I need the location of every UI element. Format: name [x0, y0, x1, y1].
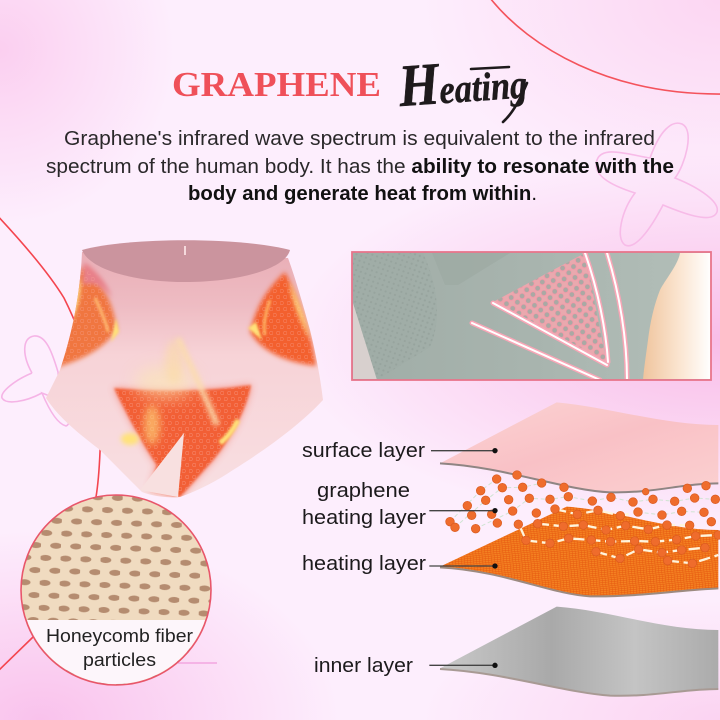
decorative red curve: left: [0, 212, 101, 673]
graphene bonds: [520, 509, 718, 563]
shoulder ribbing: [432, 253, 510, 285]
honeycomb fiber magnifier: [20, 494, 212, 686]
magnifier texture: [21, 495, 211, 685]
description line 1: Graphene's infrared wave spectrum is equivalent to the infrared: [64, 128, 655, 150]
title word: GRAPHENE: GRAPHENE: [172, 65, 381, 104]
inner layer sheet: [440, 607, 718, 695]
decorative flower outline: left: [2, 336, 69, 426]
layer labels: [302, 440, 426, 677]
fold highlight triangle: [140, 433, 184, 497]
heat patch: left hip: [60, 262, 121, 370]
description line 3: body and generate heat from within .: [188, 183, 537, 205]
layers diagram: [429, 402, 720, 696]
label: surface layer: surface layer: [302, 440, 425, 462]
heat patch: centre triangle with flame: [110, 338, 255, 500]
description line 2: spectrum of the human body. It has the ability to resonate with the: [46, 156, 674, 178]
leader lines and dots: [429, 448, 498, 668]
surface layer edge: [440, 463, 718, 492]
decorative pink dash: [178, 662, 217, 664]
surface layer sheet: [440, 402, 718, 492]
heating layer edge: [440, 567, 718, 596]
heat patch: right hip: [248, 268, 318, 368]
magnifier caption: particles: [83, 650, 156, 670]
label: graphene heating layer: heating layer: [302, 507, 426, 529]
briefs waistband inner: [82, 240, 290, 282]
magnifier ring: [21, 495, 211, 685]
decorative flower outline: right: [596, 123, 717, 246]
glowing streaks: [472, 253, 627, 380]
heat patches group: [50, 260, 318, 500]
title: [172, 44, 529, 122]
heating layer sheet: [440, 507, 718, 596]
magnifier caption: Honeycomb fiber: [46, 626, 193, 646]
shirt fabric background: [352, 252, 711, 380]
textured chest area: [353, 253, 437, 380]
label: heating layer: heating layer: [302, 553, 426, 575]
title word: Heating script: Heating: [396, 44, 529, 119]
heated briefs: [46, 240, 323, 500]
graphene particles: [446, 471, 720, 568]
panel border: [352, 252, 711, 380]
briefs body: [46, 252, 323, 497]
waist tag mark: [184, 246, 186, 255]
label: graphene heating layer: [302, 480, 426, 529]
label: graphene heating layer: graphene: [317, 480, 410, 502]
magnifier caption: [46, 626, 193, 670]
inner layer edge: [440, 669, 718, 696]
arm: [643, 253, 711, 380]
description text: [46, 128, 674, 205]
magnifier caption background: [27, 620, 205, 684]
decorative red curve: top right: [490, 0, 720, 94]
honeycomb triangle: [493, 253, 607, 365]
pale corner: [353, 303, 377, 380]
shirt photo panel: [352, 252, 711, 380]
faint lattice: [450, 479, 715, 529]
label: inner layer: inner layer: [314, 655, 413, 677]
